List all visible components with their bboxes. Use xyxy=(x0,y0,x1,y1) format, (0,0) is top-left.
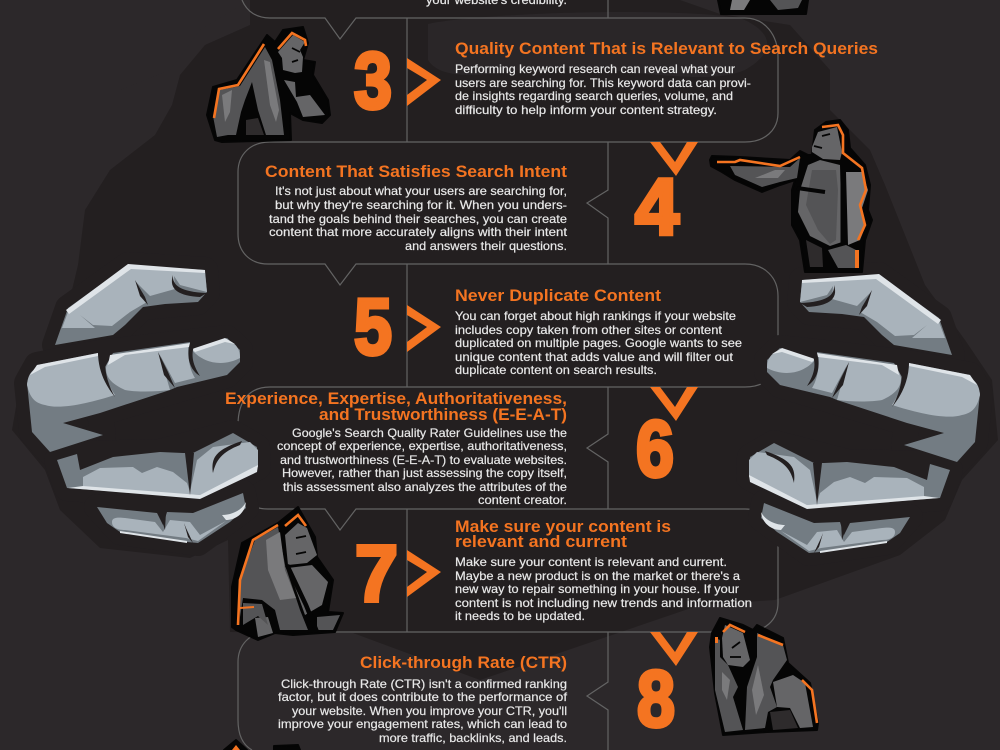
body text xyxy=(277,426,567,507)
heading: Click-through Rate (CTR) xyxy=(360,654,567,672)
body text: difficulty to help inform your content strategy. xyxy=(455,103,717,117)
heading xyxy=(225,390,567,424)
body text xyxy=(455,555,752,623)
body text: Performing keyword research can reveal what your xyxy=(455,62,735,76)
chevron right xyxy=(407,305,441,352)
body text: concept of experience, expertise, authoritativeness, xyxy=(277,439,567,453)
section 8 xyxy=(278,618,818,745)
body text xyxy=(269,184,568,253)
number 5: 5 xyxy=(354,282,392,371)
section 4 xyxy=(265,120,872,272)
section 6 xyxy=(225,387,698,507)
body text: duplicate content on search results. xyxy=(455,363,657,377)
body text: but why they're searching for it. When you unders- xyxy=(275,198,567,212)
heading: Quality Content That is Relevant to Search Queries xyxy=(455,40,878,58)
body text: You can forget about high rankings if your website xyxy=(455,309,736,323)
body text: It's not just about what your users are searching for, xyxy=(275,184,567,198)
body text: your website. When you improve your CTR, you'll xyxy=(292,704,567,718)
body text xyxy=(455,309,742,377)
body text: unique content that adds value and will filter out xyxy=(455,350,734,364)
chevron down xyxy=(650,632,698,666)
body text: more traffic, backlinks, and leads. xyxy=(379,731,567,745)
heading xyxy=(455,518,671,551)
body text: content creator. xyxy=(478,493,567,507)
gorilla: top partial xyxy=(718,0,808,14)
chevron right xyxy=(407,550,441,597)
gorilla: pointing xyxy=(710,120,872,272)
gorilla: thinking xyxy=(207,27,330,142)
right hand halo xyxy=(749,275,980,553)
body text: it needs to be updated. xyxy=(455,609,585,623)
body text xyxy=(278,677,568,745)
chevron down xyxy=(650,142,698,176)
number 8: 8 xyxy=(637,654,675,743)
number 3: 3 xyxy=(354,36,392,125)
number 4: 4 xyxy=(635,162,679,251)
body text xyxy=(455,62,751,117)
chevron down xyxy=(650,387,698,421)
heading: Never Duplicate Content xyxy=(455,287,662,305)
body text: content is not including new trends and information xyxy=(455,596,752,610)
left gorilla hand xyxy=(27,264,258,543)
body text: Click-through Rate (CTR) isn't a confirmed ranking xyxy=(281,677,567,691)
heading: Content That Satisfies Search Intent xyxy=(265,163,568,181)
heading: and Trustworthiness (E-E-A-T) xyxy=(319,406,567,424)
right gorilla hand xyxy=(749,274,980,553)
heading: relevant and current xyxy=(455,533,628,551)
body text: Maybe a new product is on the market or there's a xyxy=(455,569,740,583)
body text: users are searching for. This keyword data can provi- xyxy=(455,76,751,90)
body text: duplicated on multiple pages. Google wants to see xyxy=(455,336,742,350)
section 7 xyxy=(232,507,752,640)
gorilla: bottom partial xyxy=(224,740,300,750)
body text: new way to repair something in your house. If your xyxy=(455,582,739,596)
gorilla: standing on fists xyxy=(710,618,818,735)
heading: Make sure your content is xyxy=(455,518,671,536)
gorilla: sitting xyxy=(232,507,343,640)
body text: and answers their questions. xyxy=(405,239,567,253)
section 5 xyxy=(354,282,742,377)
body text: this assessment also analyzes the attributes of the xyxy=(283,480,567,494)
section 3 xyxy=(207,27,878,142)
body text: factor, but it does contribute to the performance of xyxy=(278,690,568,704)
chevron right xyxy=(407,58,441,106)
body text: improve your engagement rates, which can lead to xyxy=(278,717,567,731)
connector lines xyxy=(238,0,778,750)
body text: Make sure your content is relevant and current. xyxy=(455,555,727,569)
number 7: 7 xyxy=(355,529,398,618)
body text: tand the goals behind their searches, you can create xyxy=(269,212,567,226)
heading: Experience, Expertise, Authoritativeness, xyxy=(225,390,567,408)
left hand halo xyxy=(27,265,258,543)
body text: and trustworthiness (E-E-A-T) to evaluate websites. xyxy=(280,453,567,467)
body text: Google's Search Quality Rater Guidelines use the xyxy=(292,426,567,440)
number 6: 6 xyxy=(636,404,674,493)
body text: However, rather than just assessing the copy itself, xyxy=(282,466,567,480)
body text: content that more accurately aligns with their intent xyxy=(269,225,568,239)
body text: includes copy taken from other sites or content xyxy=(455,323,723,337)
body text: de insights regarding search queries, volume, and xyxy=(455,89,733,103)
